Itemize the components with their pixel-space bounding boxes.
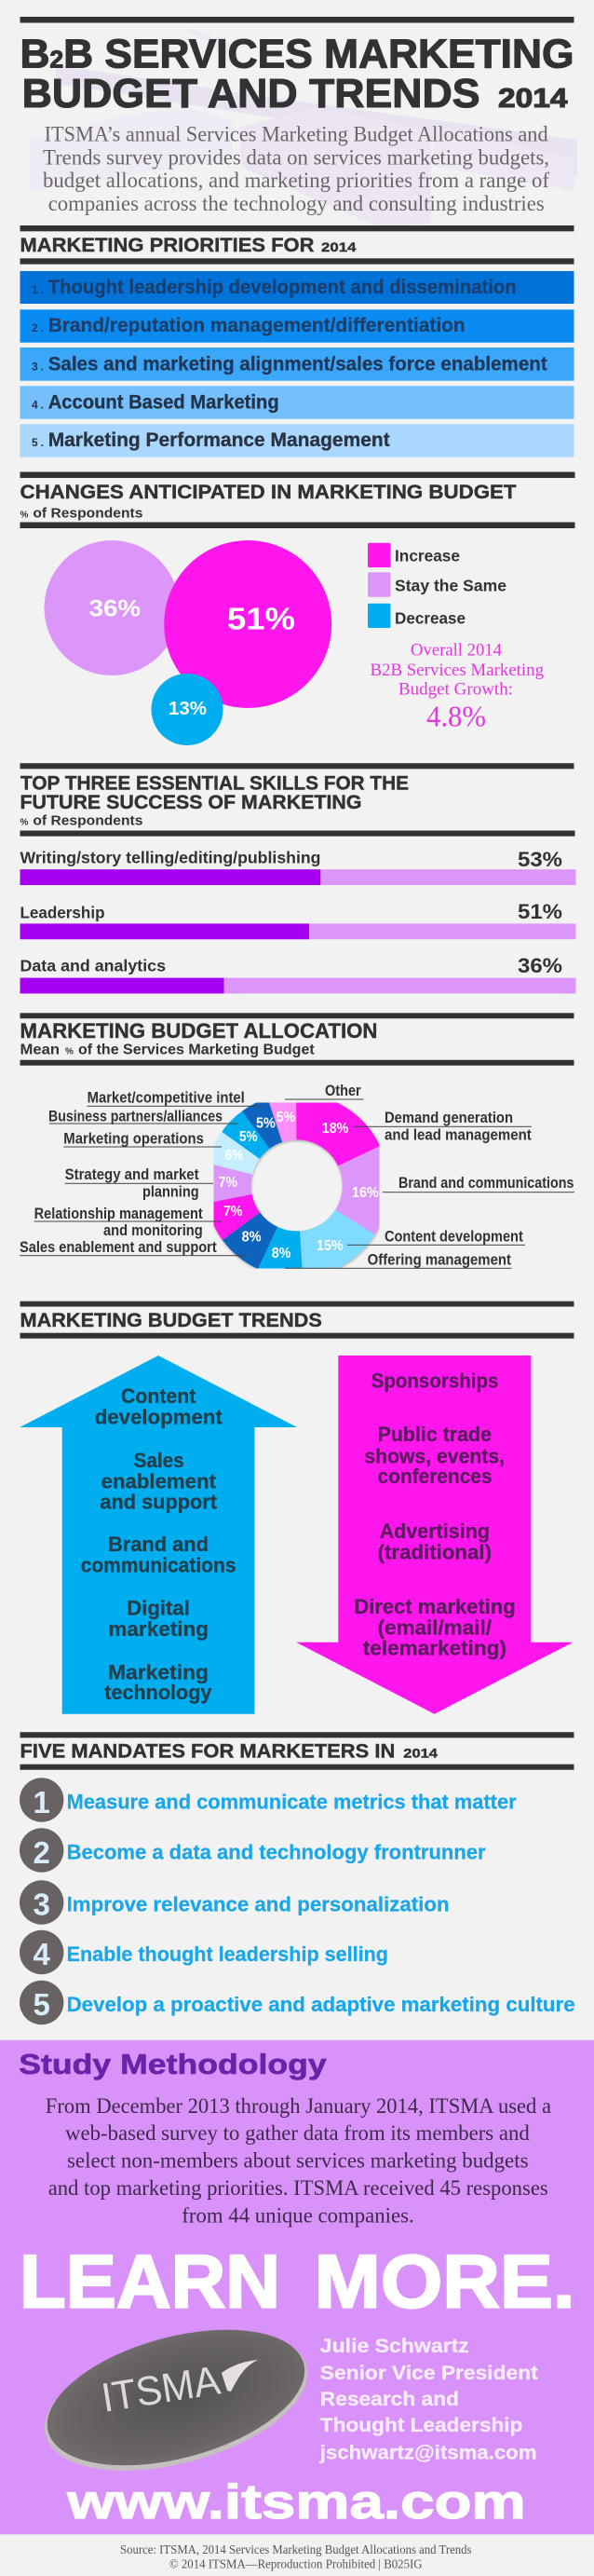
section: changes anticipated bbox=[20, 471, 575, 745]
decreasing list: conferences bbox=[378, 1465, 492, 1488]
donut labels: Market/competitive intel bbox=[88, 1089, 245, 1106]
section: marketing priorities bbox=[20, 225, 574, 457]
section: budget allocation bbox=[20, 1013, 574, 1269]
skill bar: writing bbox=[20, 848, 575, 885]
increasing list: enablement bbox=[101, 1469, 216, 1492]
logo: ITSMA badge bbox=[30, 2305, 322, 2496]
mandate 2: Become a data and technology frontrunner bbox=[67, 1841, 486, 1864]
section: top three skills bbox=[20, 763, 575, 993]
learn more: LEARN bbox=[20, 2241, 280, 2324]
bubble: decrease: 13% bbox=[169, 699, 207, 719]
priority 2: Brand/reputation management/differentiation bbox=[48, 315, 466, 336]
methodology paragraph: web-based survey to gather data from its members and bbox=[65, 2121, 530, 2145]
mandate 3: 3 bbox=[34, 1888, 50, 1922]
bubble: stay the same bbox=[45, 540, 179, 675]
title: B2B SERVICES MARKETING bbox=[20, 32, 574, 77]
increasing list: development bbox=[95, 1405, 223, 1428]
subheading: of Respondents bbox=[33, 505, 142, 522]
title: BUDGET AND TRENDS bbox=[22, 71, 480, 116]
donut labels: Offering management bbox=[368, 1251, 511, 1268]
priority 3: 3. bbox=[32, 360, 44, 373]
mandate 4 bbox=[20, 1930, 388, 1974]
mandate 1: 1 bbox=[34, 1785, 50, 1820]
section: five mandates bbox=[20, 1732, 575, 2024]
subheading: % bbox=[65, 1047, 74, 1057]
methodology heading: Study Methodology bbox=[19, 2048, 328, 2080]
donut labels: Strategy and market bbox=[65, 1166, 199, 1183]
priority 4 bbox=[20, 386, 574, 419]
priority 1: 1. bbox=[32, 283, 44, 296]
donut labels: Content development bbox=[385, 1228, 523, 1245]
increasing list: Digital bbox=[127, 1597, 190, 1620]
callout: budget growth: 4.8% bbox=[426, 699, 486, 732]
increasing list: and support bbox=[100, 1490, 217, 1513]
donut labels: Other bbox=[325, 1083, 361, 1099]
donut percentages: 18% bbox=[322, 1121, 348, 1137]
subheading: of the Services Marketing Budget bbox=[78, 1043, 315, 1058]
decreasing list: Sponsorships bbox=[371, 1369, 498, 1392]
increasing list: Sales bbox=[134, 1449, 184, 1472]
donut percentages: 5% bbox=[239, 1129, 258, 1145]
subheading: Mean bbox=[20, 1043, 60, 1058]
skill bar: leadership: 51% bbox=[518, 900, 562, 923]
donut percentages: 6% bbox=[225, 1148, 243, 1164]
footer source: © 2014 ITSMA—Reproduction Prohibited | B025IG bbox=[169, 2557, 423, 2571]
mandate 3 bbox=[20, 1880, 450, 1925]
subheading: % bbox=[20, 511, 28, 520]
learn more: MORE. bbox=[315, 2241, 575, 2324]
methodology paragraph: From December 2013 through January 2014, ITSMA used a bbox=[46, 2094, 551, 2118]
priority 3 bbox=[20, 348, 574, 381]
intro paragraph: ITSMA’s annual Services Marketing Budget Allocations and bbox=[45, 123, 548, 146]
donut percentages: 8% bbox=[242, 1230, 262, 1246]
donut percentages: 8% bbox=[272, 1246, 290, 1261]
priority 5: Marketing Performance Management bbox=[48, 429, 390, 451]
callout: budget growth: B2B Services Marketing bbox=[371, 661, 544, 680]
methodology paragraph: select non-members about services marketing budgets bbox=[67, 2148, 529, 2172]
priority 5 bbox=[20, 424, 574, 457]
mandate 1 bbox=[20, 1778, 517, 1822]
title bbox=[20, 32, 574, 116]
donut percentages: 15% bbox=[317, 1238, 344, 1254]
subheading: % bbox=[20, 817, 28, 827]
donut labels: Relationship management bbox=[34, 1206, 203, 1222]
arrow: down bbox=[296, 1356, 574, 1714]
skill bar: writing: 53% bbox=[518, 848, 562, 871]
methodology paragraph: from 44 unique companies. bbox=[182, 2204, 414, 2228]
priority 1 bbox=[20, 271, 574, 304]
panel: study methodology bbox=[0, 2040, 594, 2534]
decreasing list: shows, events, bbox=[364, 1444, 505, 1467]
priority 1: Thought leadership development and dissemination bbox=[48, 277, 517, 298]
intro paragraph: companies across the technology and consulting industries bbox=[48, 192, 545, 215]
mandate 4: 4 bbox=[34, 1937, 51, 1971]
decreasing list: Direct marketing bbox=[354, 1595, 516, 1618]
background watermark bbox=[30, 23, 577, 228]
legend: Stay the Same bbox=[395, 576, 506, 594]
decreasing list bbox=[354, 1369, 516, 1659]
callout: budget growth: Budget Growth: bbox=[398, 680, 513, 700]
contact details: Senior Vice President bbox=[320, 2362, 538, 2384]
priority 2: 2. bbox=[32, 321, 44, 334]
donut percentages: 5% bbox=[277, 1110, 295, 1125]
donut labels: Marketing operations bbox=[63, 1130, 204, 1147]
skill bar: leadership: Leadership bbox=[20, 903, 104, 921]
mandate 1: Measure and communicate metrics that matter bbox=[67, 1791, 517, 1814]
contact details: jschwartz@itsma.com bbox=[319, 2441, 536, 2463]
decreasing list: Public trade bbox=[378, 1423, 492, 1446]
legend bbox=[368, 543, 506, 628]
arrow: up bbox=[20, 1356, 297, 1714]
heading: top three skills: TOP THREE ESSENTIAL SKILLS FOR THE bbox=[20, 773, 409, 794]
donut percentages: 7% bbox=[219, 1175, 237, 1191]
methodology paragraph: and top marketing priorities. ITSMA received 45 responses bbox=[48, 2176, 548, 2200]
donut labels: Demand generation bbox=[385, 1110, 513, 1126]
website url: www.itsma.com bbox=[66, 2475, 526, 2529]
header bar bbox=[20, 17, 574, 22]
decreasing list: (email/mail/ bbox=[378, 1615, 493, 1639]
increasing list: marketing bbox=[108, 1617, 209, 1641]
intro paragraph: budget allocations, and marketing priorities from a range of bbox=[43, 169, 549, 192]
decreasing list: (traditional) bbox=[378, 1540, 492, 1563]
donut labels bbox=[20, 1083, 574, 1269]
intro paragraph: Trends survey provides data on services marketing budgets, bbox=[43, 146, 549, 170]
donut percentages: 5% bbox=[256, 1116, 276, 1132]
contact details: Thought Leadership bbox=[320, 2414, 522, 2436]
heading: marketing priorities: 2014 bbox=[321, 239, 357, 254]
decreasing list: Advertising bbox=[380, 1520, 490, 1543]
donut labels: planning bbox=[142, 1183, 199, 1200]
priority 5: 5. bbox=[32, 436, 44, 449]
callout: budget growth: Overall 2014 bbox=[411, 641, 502, 661]
priority 2 bbox=[20, 309, 574, 343]
logo: ITSMA badge: ITSMA bbox=[99, 2357, 223, 2421]
section: budget trends bbox=[20, 1302, 574, 1714]
mandate 2: 2 bbox=[34, 1835, 50, 1870]
mandate 2 bbox=[20, 1828, 486, 1873]
mandate 5 bbox=[20, 1981, 575, 2024]
skill bar: data and analytics: Data and analytics bbox=[20, 956, 166, 975]
intro paragraph bbox=[43, 123, 549, 215]
heading: budget trends: MARKETING BUDGET TRENDS bbox=[20, 1310, 322, 1331]
skill bar: data and analytics bbox=[20, 954, 575, 993]
priority 4: 4. bbox=[32, 398, 44, 411]
footer source bbox=[120, 2543, 471, 2571]
donut labels: Business partners/alliances bbox=[48, 1108, 223, 1124]
skill bar: writing: Writing/story telling/editing/publishing bbox=[20, 849, 321, 867]
learn more bbox=[20, 2241, 575, 2324]
increasing list: Marketing bbox=[108, 1660, 209, 1683]
increasing list: Brand and bbox=[108, 1533, 209, 1556]
callout: budget growth bbox=[371, 641, 544, 732]
mandate 5: 5 bbox=[34, 1987, 50, 2022]
heading: five mandates: FIVE MANDATES FOR MARKETERS IN bbox=[20, 1741, 395, 1763]
heading: marketing priorities: MARKETING PRIORITIES FOR bbox=[20, 235, 315, 256]
donut chart bbox=[219, 1110, 379, 1261]
decreasing list: telemarketing) bbox=[363, 1636, 506, 1659]
skill bar: data and analytics: 36% bbox=[518, 954, 562, 977]
bubble: decrease bbox=[151, 674, 223, 745]
increasing list: Content bbox=[121, 1384, 196, 1408]
heading: five mandates: 2014 bbox=[403, 1746, 438, 1761]
donut labels: Sales enablement and support bbox=[20, 1239, 217, 1256]
donut percentages bbox=[219, 1110, 379, 1261]
contact details: Julie Schwartz bbox=[320, 2335, 469, 2357]
bubble: increase: 51% bbox=[227, 601, 295, 635]
methodology paragraph bbox=[46, 2094, 551, 2228]
legend: Decrease bbox=[395, 609, 466, 628]
bubble: stay the same: 36% bbox=[89, 596, 141, 622]
heading: changes anticipated: CHANGES ANTICIPATED IN MARKETING BUDGET bbox=[20, 482, 517, 503]
donut percentages: 7% bbox=[223, 1204, 242, 1220]
skill bar: leadership bbox=[20, 900, 575, 939]
heading: budget allocation: MARKETING BUDGET ALLOCATION bbox=[20, 1019, 378, 1043]
donut percentages: 16% bbox=[352, 1185, 379, 1201]
contact details: Research and bbox=[320, 2388, 459, 2410]
heading: top three skills bbox=[20, 773, 409, 813]
increasing list: communications bbox=[81, 1553, 236, 1576]
mandate 3: Improve relevance and personalization bbox=[67, 1893, 450, 1916]
donut labels: and lead management bbox=[385, 1126, 532, 1143]
priority 4: Account Based Marketing bbox=[48, 391, 279, 413]
priority 3: Sales and marketing alignment/sales force enablement bbox=[48, 353, 547, 375]
mandate 5: Develop a proactive and adaptive marketing culture bbox=[67, 1993, 575, 2016]
legend: Increase bbox=[395, 547, 460, 566]
title: 2014 bbox=[498, 84, 568, 114]
increasing list bbox=[81, 1384, 236, 1704]
donut labels: and monitoring bbox=[103, 1222, 203, 1239]
increasing list: technology bbox=[104, 1681, 212, 1704]
donut slices bbox=[228, 1116, 366, 1254]
footer source: Source: ITSMA, 2014 Services Marketing Budget Allocations and Trends bbox=[120, 2543, 471, 2557]
mandate 4: Enable thought leadership selling bbox=[67, 1942, 388, 1966]
subheading: of Respondents bbox=[33, 812, 142, 828]
contact details bbox=[319, 2335, 538, 2463]
heading: top three skills: FUTURE SUCCESS OF MARKETING bbox=[20, 792, 361, 813]
bubble: increase bbox=[164, 540, 331, 708]
